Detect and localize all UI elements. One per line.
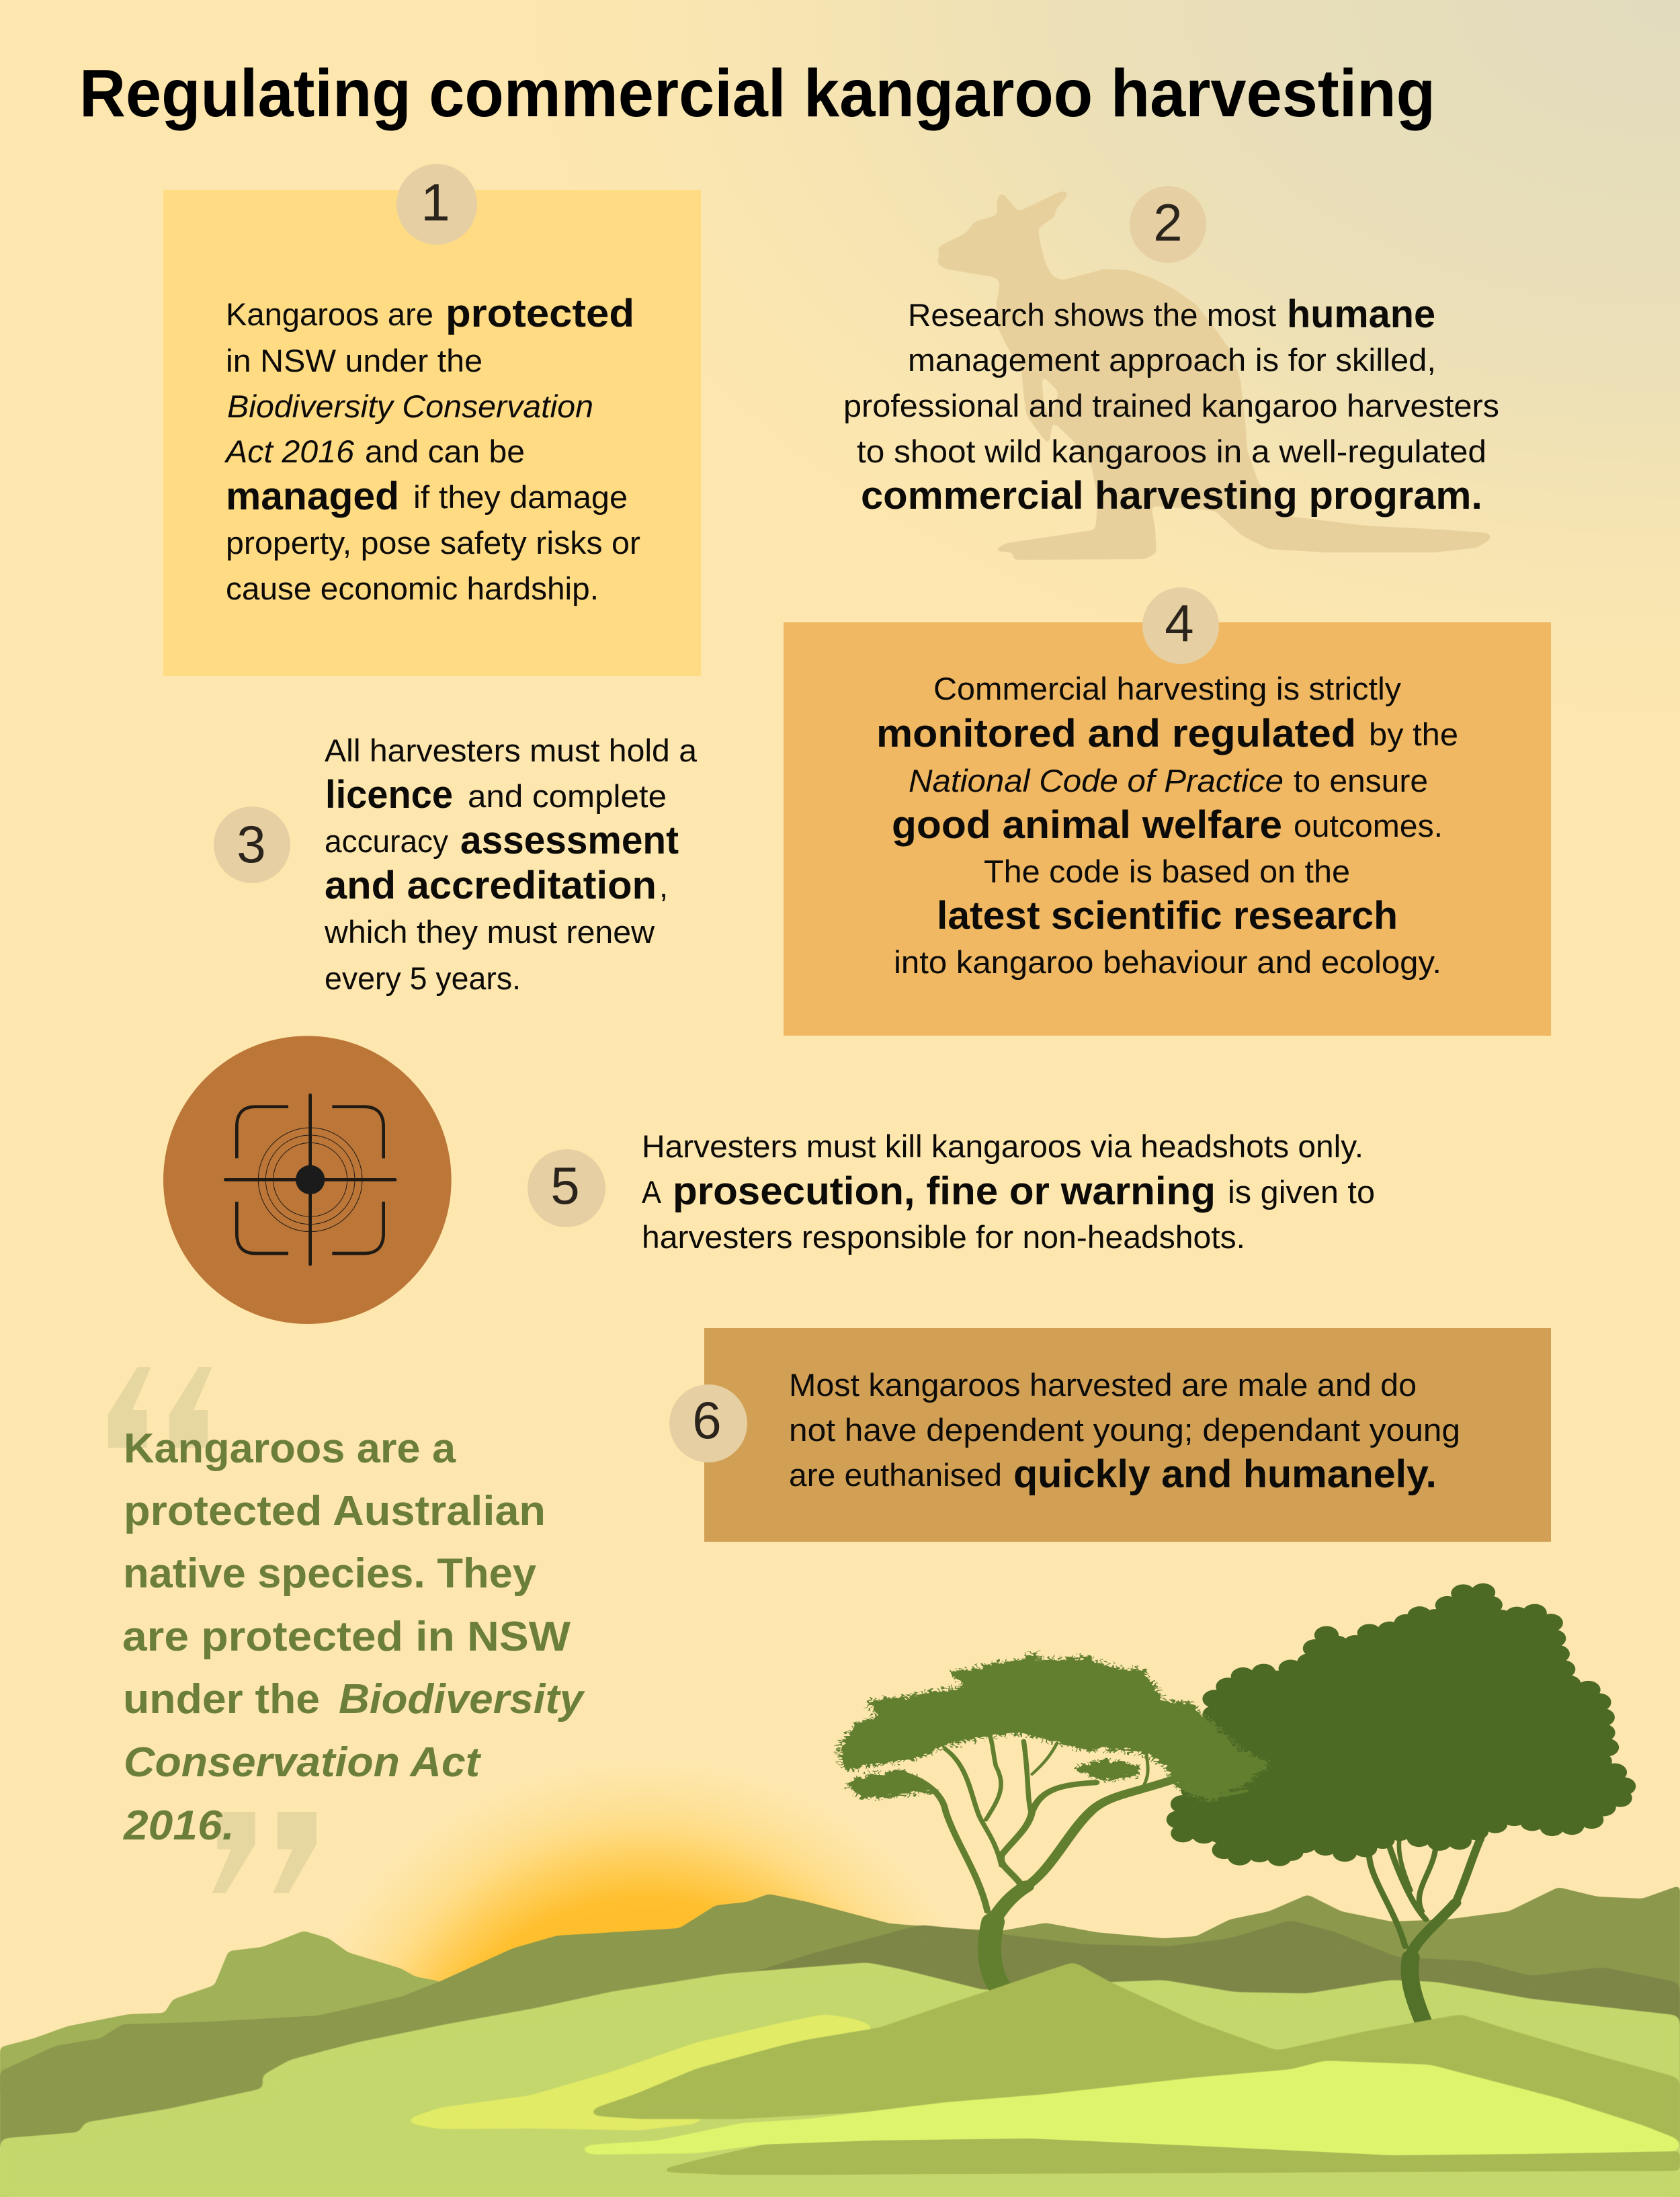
icon: sun glow [282,1754,1008,2197]
text block 2 [843,292,1499,517]
front hill [588,1962,1680,2147]
icon: kangaroo silhouette [937,191,1493,560]
text block 1: in NSW under the [226,343,482,378]
panel: step 5 [528,1128,1375,1255]
icon: closing quote mark [212,1812,317,1893]
far mountain range [0,1885,1680,2151]
text block 2: management approach is for skilled, [908,342,1436,378]
number badge 5 [528,1149,605,1227]
far hill left [0,1931,470,2097]
icon: crosshair target [163,1036,452,1324]
number badge 5: 5 [550,1156,580,1215]
box 1 background [163,190,701,676]
text block 6 [789,1367,1460,1496]
main light green hill [0,1962,1680,2197]
text block 1 [224,292,640,606]
number badge 3 [214,806,290,883]
box 6 background [704,1328,1551,1542]
text block 1: cause economic hardship. [226,571,599,606]
number badge 1: 1 [421,173,450,232]
foreground band [663,2139,1680,2175]
bright foreground grass [574,2061,1680,2155]
tree: dark gum canopy and trunk [1177,1592,1628,2022]
text block 5 [642,1128,1375,1255]
number badge 6 [669,1384,747,1462]
quote text: are protected in NSW [122,1614,571,1660]
text block 4: outcomes. [1294,808,1443,843]
text block 1: property, pose safety risks or [226,525,640,561]
darker mountain range [663,1920,1680,2151]
panel: pull quote [108,1367,586,1893]
text block 3: every 5 years. [325,960,521,996]
ground base [0,2151,1680,2197]
number badge 3: 3 [237,815,266,874]
number badge 4 [1142,587,1219,664]
text block 4: into kangaroo behaviour and ecology. [894,944,1441,980]
text block 3: accuracy [325,823,448,859]
title: Regulating commercial kangaroo harvesting [79,56,1435,131]
panel: step 1 [163,164,701,676]
text block 3: All harvesters must hold a [325,733,698,768]
text block 1: Kangaroos are [226,296,433,332]
landscape: hills and trees [0,1592,1680,2197]
text block 3: and complete [468,778,667,814]
text block 4: good animal welfare [892,803,1282,847]
text block 2: professional and trained kangaroo harvesters [843,388,1499,423]
text block 2: Research shows the most [908,297,1276,333]
text block 3: assessment [460,819,679,862]
text block 6: are euthanised [789,1457,1002,1493]
panel: step 6 [669,1328,1551,1542]
text block 5: A [642,1174,662,1210]
text block 1: Act 2016 [224,433,355,469]
quote text: Kangaroos are a [124,1425,456,1472]
quote text: native species. They [123,1550,537,1597]
quote text [122,1425,586,1849]
number badge 1 [396,164,477,245]
text block 6: quickly and humanely. [1013,1452,1437,1496]
text block 2: humane [1287,292,1435,336]
text block 1: and can be [365,433,525,469]
text block 4: latest scientific research [937,894,1398,938]
text block 4 [876,671,1458,980]
quote text: Biodiversity [339,1676,586,1723]
box 4 background [784,622,1551,1036]
text block 2: to shoot wild kangaroos in a well-regulated [857,433,1486,469]
number badge 2 [1130,186,1206,263]
text block 3: and accreditation [325,864,657,907]
text block 6: not have dependent young; dependant young [789,1412,1460,1448]
text block 5: Harvesters must kill kangaroos via headshots only. [642,1128,1363,1164]
text block 1: Biodiversity Conservation [227,388,593,424]
text block 2: commercial harvesting program. [861,474,1482,517]
quote text: Conservation Act [124,1739,481,1786]
text block 5: prosecution, fine or warning [673,1169,1216,1213]
text block 3 [324,733,698,996]
quote text: protected Australian [124,1488,546,1534]
text block 4: National Code of Practice [909,763,1284,798]
quote text: under the [123,1676,320,1723]
text block 6: Most kangaroos harvested are male and do [789,1367,1417,1403]
text block 4: The code is based on the [984,854,1350,889]
text block 4: Commercial harvesting is strictly [933,671,1402,706]
yellow strip of grass [398,2014,879,2130]
text block 3: , [659,868,668,904]
tree: acacia canopy and trunk [841,1652,1269,1988]
panel: step 2 [843,186,1499,517]
text block 3: licence [325,773,453,817]
panel: step 4 [784,587,1551,1036]
icon: opening quote mark [108,1367,212,1448]
text block 5: harvesters responsible for non-headshots. [642,1219,1245,1255]
panel: step 3 [214,733,698,996]
text block 3: which they must renew [324,914,655,950]
number badge 2: 2 [1153,193,1183,252]
text block 1: if they damage [413,479,628,515]
number badge 6: 6 [692,1391,722,1450]
text block 4: monitored and regulated [876,712,1356,755]
text block 4: by the [1369,716,1458,752]
quote text: 2016. [123,1802,235,1849]
number badge 4: 4 [1165,593,1194,653]
text block 5: is given to [1228,1174,1375,1210]
text block 1: managed [226,474,399,518]
text block 4: to ensure [1294,763,1428,798]
text block 1: protected [446,292,634,335]
